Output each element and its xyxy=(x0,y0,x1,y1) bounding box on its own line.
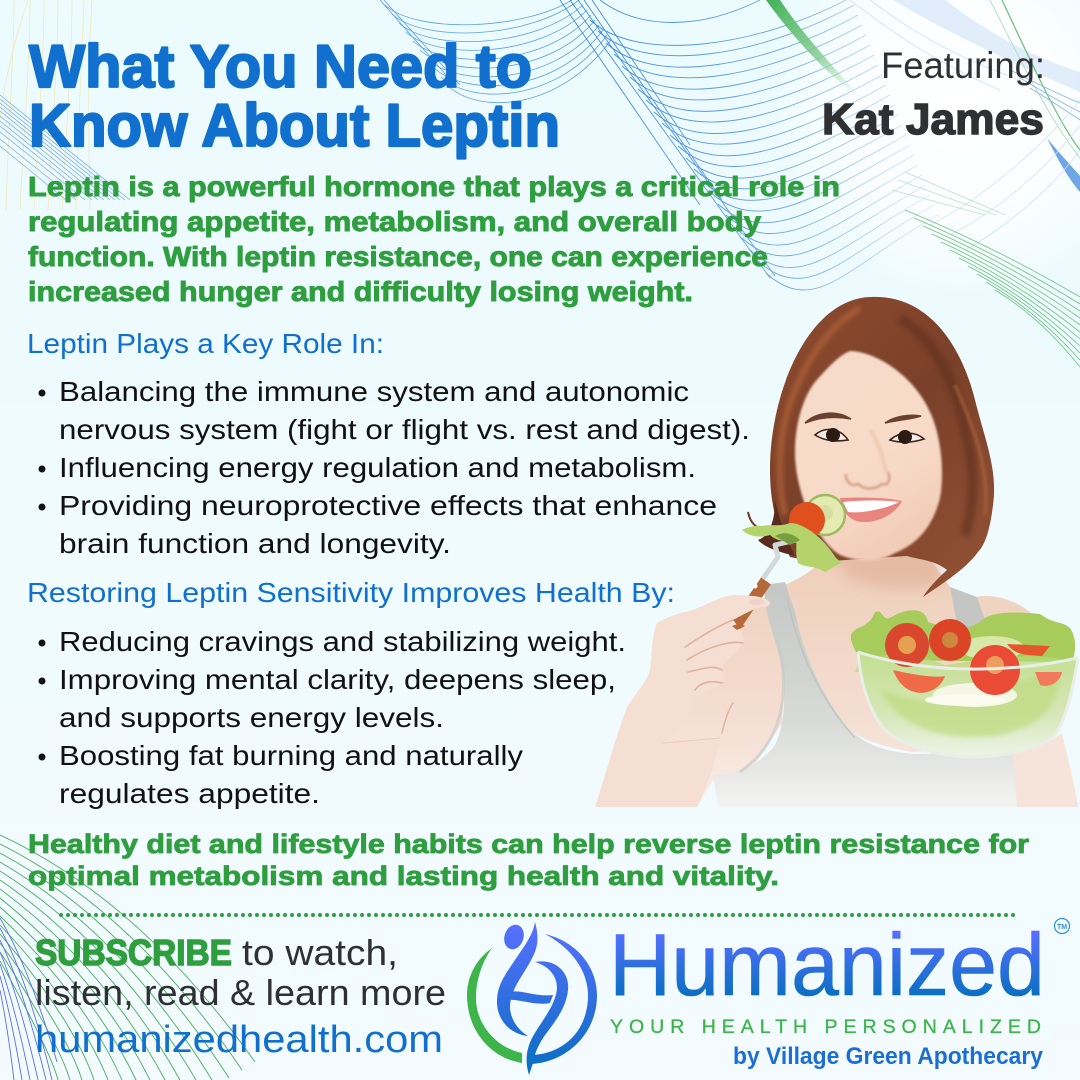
heading: restoring sensitivity: Restoring Leptin Sensitivity Improves Health By: xyxy=(27,577,675,608)
photo: salad on fork xyxy=(742,495,845,572)
logo icon xyxy=(467,922,597,1075)
list: health improvements: regulates appetite. xyxy=(59,778,320,809)
photo: right shoulder xyxy=(977,596,1050,650)
trademark mark xyxy=(1054,918,1070,934)
list: key roles xyxy=(38,376,750,559)
wave lines: right green xyxy=(892,172,1080,367)
closing statement: optimal metabolism and lasting health and vitality. xyxy=(28,861,779,891)
intro paragraph: function. With leptin resistance, one can experience xyxy=(28,241,768,272)
photo: face xyxy=(795,351,942,560)
title xyxy=(29,33,560,159)
list: health improvements: and supports energy levels. xyxy=(59,702,444,733)
photo: lettuce on top xyxy=(851,610,1075,662)
photo: right arm xyxy=(983,733,1078,807)
logo tagline: YOUR HEALTH PERSONALIZED xyxy=(610,1016,1041,1038)
intro paragraph: regulating appetite, metabolism, and overall body xyxy=(28,206,761,237)
subscribe call to action: to watch, xyxy=(242,932,398,973)
intro paragraph xyxy=(28,171,840,307)
photo: nose shadow xyxy=(846,430,889,488)
heading: key role: Leptin Plays a Key Role In: xyxy=(27,328,384,359)
photo: salad bowl xyxy=(851,610,1078,757)
wave lines: left blue band xyxy=(0,95,130,200)
photo: neck and chest xyxy=(785,552,1015,752)
wave lines: top centre blue xyxy=(380,0,611,103)
subscribe call to action: listen, read & learn more xyxy=(35,972,446,1013)
list: health improvements: Boosting fat burning and naturally xyxy=(59,740,523,771)
photo: hair xyxy=(748,297,994,597)
subscribe call to action: humanizedhealth.com xyxy=(35,1019,443,1061)
list: key roles: Influencing energy regulation and metabolism. xyxy=(59,452,696,483)
title: What You Need to xyxy=(29,33,532,100)
photo: smile xyxy=(840,497,902,522)
featured name: Kat James xyxy=(822,95,1044,144)
closing statement xyxy=(28,829,1030,891)
photo: eyes and brows xyxy=(805,413,924,444)
wave lines: central blue caustic xyxy=(560,0,938,290)
closing statement: Healthy diet and lifestyle habits can help reverse leptin resistance for xyxy=(28,829,1030,859)
wave lines: top right xyxy=(850,0,1080,250)
list: health improvements: Reducing cravings and stabilizing weight. xyxy=(59,626,626,657)
intro paragraph: increased hunger and difficulty losing weight. xyxy=(28,276,693,307)
logo wordmark: Humanized xyxy=(609,915,1045,1014)
photo: grey tank top xyxy=(713,582,1017,807)
trademark mark: TM xyxy=(1057,924,1067,931)
list: health improvements: Improving mental clarity, deepens sleep, xyxy=(59,664,616,695)
wave lines: top left yellow xyxy=(0,0,92,210)
wave lines: green band top xyxy=(766,0,868,104)
list: key roles: brain function and longevity. xyxy=(59,528,451,559)
photo: hand and forearm xyxy=(595,595,770,807)
title: Know About Leptin xyxy=(29,92,560,159)
list: health improvements xyxy=(38,626,626,809)
featuring label: Featuring: xyxy=(881,45,1045,86)
wave lines: bottom left blue xyxy=(0,918,57,1080)
list: key roles: Balancing the immune system and autonomic xyxy=(59,376,689,407)
photo: woman eating salad xyxy=(595,297,1078,807)
list: key roles: nervous system (fight or flight vs. rest and digest). xyxy=(59,414,750,445)
intro paragraph: Leptin is a powerful hormone that plays a critical role in xyxy=(28,171,840,202)
photo: fork xyxy=(735,538,805,626)
photo: neck shadow xyxy=(825,530,945,588)
subscribe call to action xyxy=(35,932,446,1061)
wave lines: bottom left green xyxy=(0,835,255,1080)
logo byline: by Village Green Apothecary xyxy=(733,1043,1044,1070)
photo: upper arm xyxy=(640,604,785,807)
subscribe call to action: SUBSCRIBE xyxy=(35,932,232,973)
list: key roles: Providing neuroprotective effects that enhance xyxy=(59,490,717,521)
